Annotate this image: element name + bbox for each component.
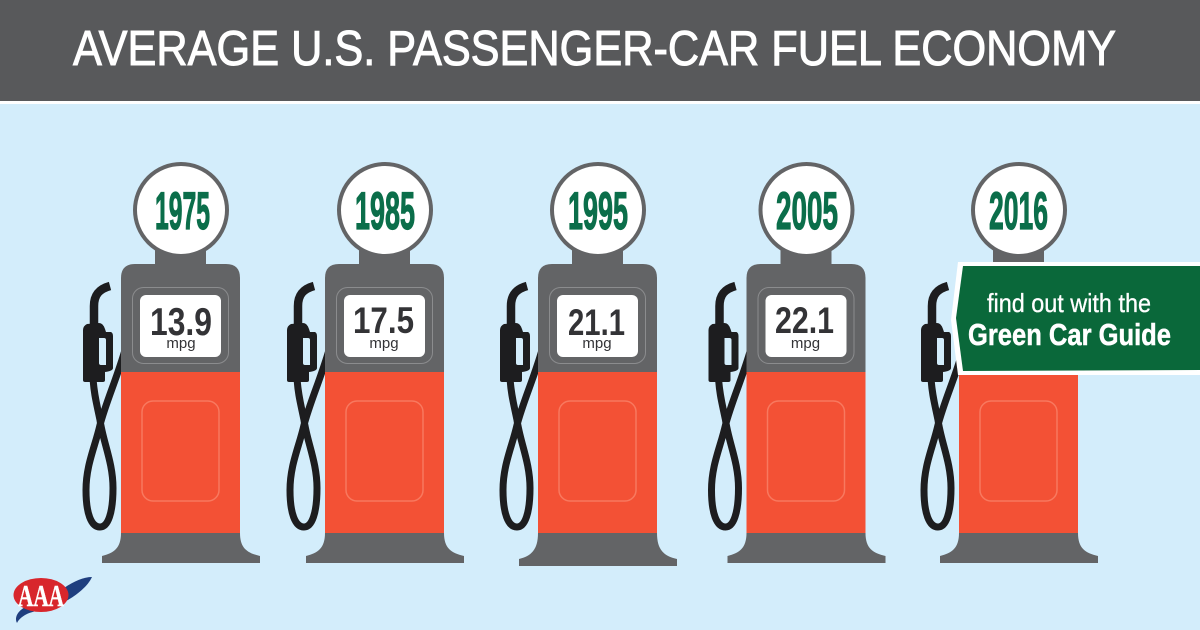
pump: 2005 <box>708 164 886 563</box>
pump: 1985 <box>287 164 464 563</box>
pump: 2005: 2005 <box>776 182 838 241</box>
callout: green car guide sign: find out with the <box>987 288 1151 318</box>
pump: 1975: 13.9 <box>150 301 212 344</box>
logo: AAA: AAA <box>18 578 64 613</box>
pump: 1975: 1975 <box>155 182 210 241</box>
callout: green car guide sign <box>951 262 1200 375</box>
pump: 1995 <box>500 164 677 566</box>
logo: AAA <box>14 577 92 623</box>
pump: 1985: 17.5 <box>353 300 414 341</box>
pump: 2005: mpg <box>791 335 820 352</box>
pump: 2005: 22.1 <box>775 300 834 341</box>
pump: 1975: mpg <box>166 335 196 352</box>
pump: 1995: mpg <box>582 335 612 352</box>
pump: 1985: mpg <box>369 335 399 352</box>
pump: 2016: 2016 <box>989 182 1048 241</box>
pump: 2016 <box>921 164 1098 563</box>
pump: 1975 <box>83 164 260 563</box>
pump: 1995: 21.1 <box>568 302 625 343</box>
pump: 1995: 1995 <box>568 182 628 241</box>
pump: 1985: 1985 <box>355 182 415 241</box>
title banner <box>0 0 1200 104</box>
